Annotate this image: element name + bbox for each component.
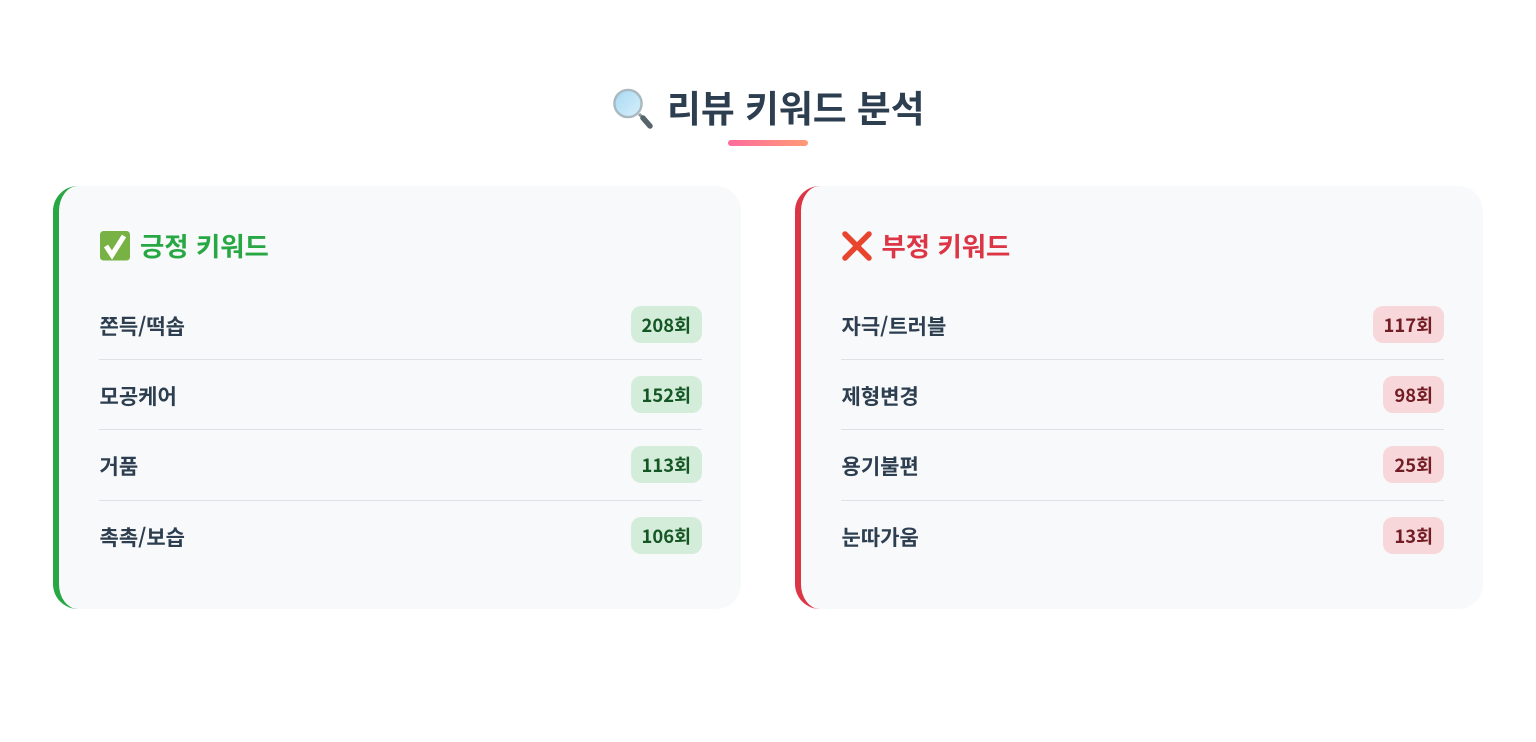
panel: positive keywords	[53, 186, 741, 609]
row: 모공케어: 모공케어	[100, 381, 177, 411]
title underline	[728, 140, 808, 146]
title: 리뷰 키워드 분석	[667, 79, 925, 133]
icon: cross mark	[842, 231, 872, 261]
row: 용기불편: 25회	[1394, 452, 1433, 478]
row: 자극/트러블	[841, 290, 1444, 360]
row: 거품: 거품	[100, 451, 138, 481]
row: 제형변경: 98회	[1394, 382, 1433, 408]
row: 눈따가움: 눈따가움	[842, 522, 919, 552]
row: 촉촉/보습	[100, 517, 702, 554]
heading: negative keywords: 부정 키워드	[882, 225, 1010, 264]
row: 눈따가움: 13회	[1394, 523, 1433, 549]
row: 제형변경	[841, 360, 1444, 430]
row: 자극/트러블: 117회	[1384, 312, 1433, 338]
row: 용기불편	[841, 431, 1444, 501]
row: 용기불편: 용기불편	[842, 451, 919, 481]
row: 자극/트러블: 자극/트러블	[842, 311, 946, 341]
row: 제형변경: 제형변경	[842, 381, 919, 411]
row: 눈따가움	[842, 517, 1444, 554]
panel: negative keywords	[795, 186, 1483, 609]
row: 쫀득/떡솝	[99, 290, 702, 360]
row: 모공케어: 152회	[642, 382, 691, 408]
row: 촉촉/보습: 106회	[642, 523, 691, 549]
icon: check mark	[100, 231, 130, 260]
row: 촉촉/보습: 촉촉/보습	[100, 522, 185, 552]
row: 쫀득/떡솝: 쫀득/떡솝	[100, 311, 185, 341]
row: 거품: 113회	[642, 452, 691, 478]
icon: magnifying glass	[613, 88, 653, 129]
row: 거품	[99, 431, 702, 501]
heading: positive keywords: 긍정 키워드	[140, 225, 269, 264]
row: 쫀득/떡솝: 208회	[642, 312, 691, 338]
row: 모공케어	[99, 360, 702, 430]
